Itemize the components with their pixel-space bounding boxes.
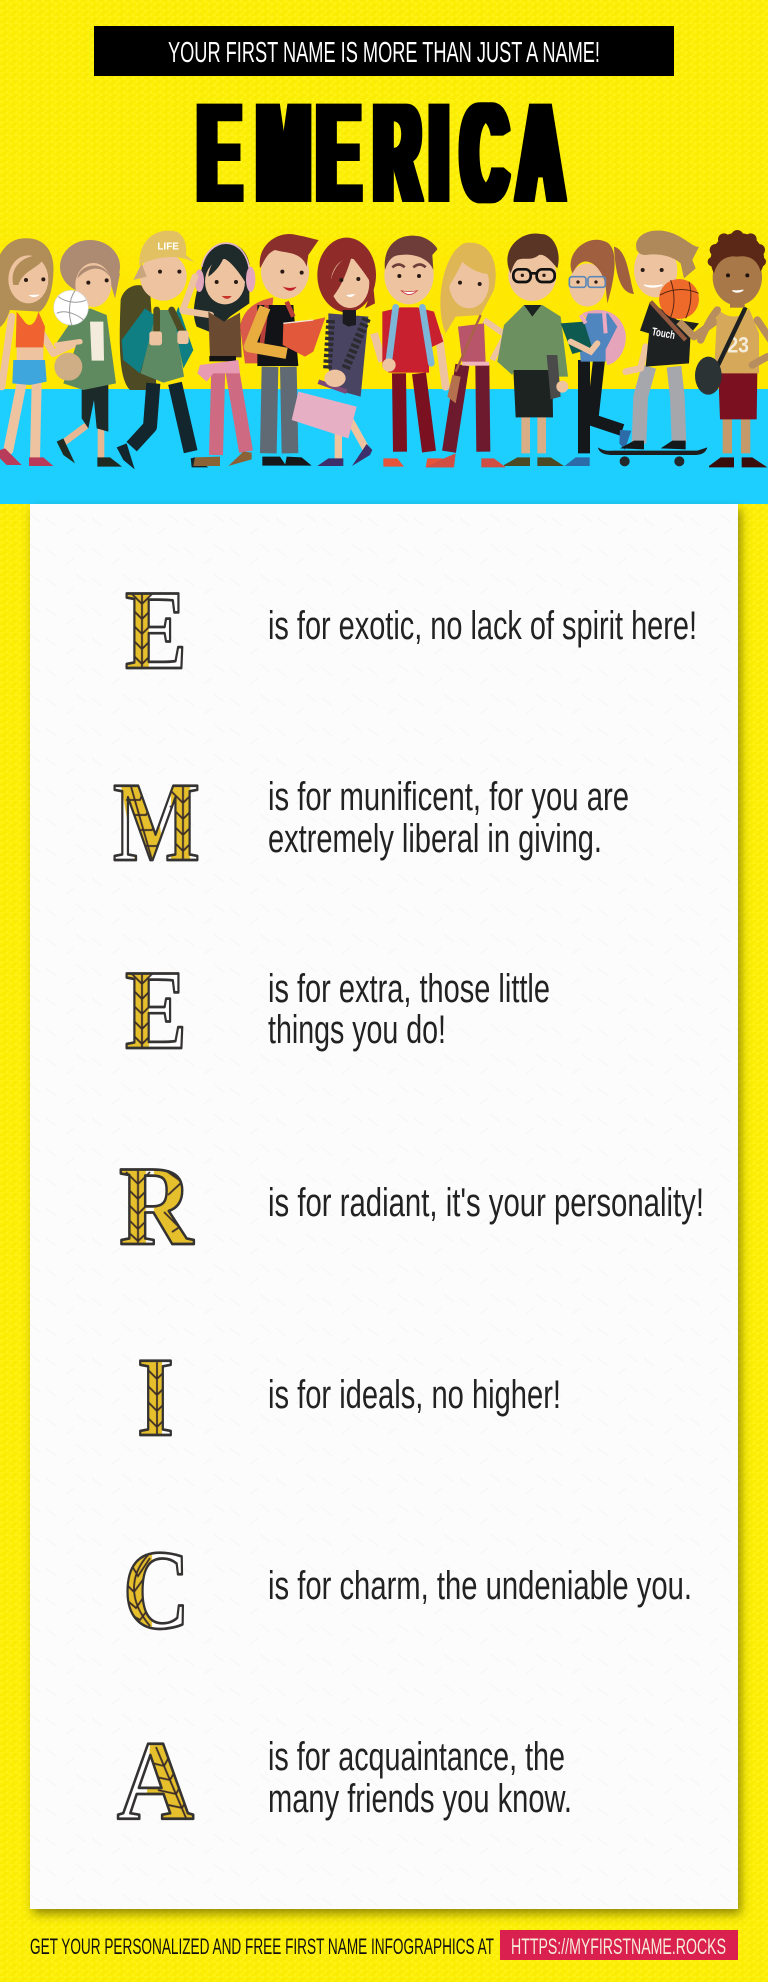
white panel	[30, 504, 738, 1909]
text: E lines	[268, 967, 550, 1052]
person: boy with cap and backpack	[117, 231, 208, 469]
letter C: C	[123, 1528, 190, 1653]
text: M lines	[268, 775, 629, 861]
person: skater boy with basketball: Touch	[651, 326, 676, 342]
blue ground band	[0, 389, 768, 504]
text: E lines: things you do!	[268, 1008, 446, 1052]
person: girl in orange top	[0, 238, 78, 466]
person: skater boy with basketball	[598, 230, 717, 466]
person: boy with tank top and shoulder bag: 23	[727, 333, 749, 358]
letter E: E	[125, 568, 187, 693]
illustration: group of people, right half	[374, 230, 768, 467]
person: boy with tank top and shoulder bag	[695, 230, 768, 467]
illustration: group of people, left half	[0, 231, 376, 469]
text: I line: is for ideals, no higher!	[268, 1373, 561, 1417]
letter I: I	[137, 1335, 174, 1460]
person: boy with cap and backpack: LIFE	[157, 241, 179, 252]
footer text: GET YOUR PERSONALIZED AND FREE FIRST NAME INFOGRAPHICS AT	[30, 1934, 494, 1959]
person: boy with book	[240, 234, 325, 466]
person: girl with volleyball	[54, 240, 122, 467]
letter M: M	[113, 760, 200, 885]
title: EMERICA	[198, 74, 563, 231]
letter E: E	[125, 948, 187, 1073]
person: boy in red shirt	[374, 236, 453, 467]
text: A lines: is for acquaintance, the	[268, 1735, 565, 1779]
text: M lines: extremely liberal in giving.	[268, 817, 602, 861]
top banner	[94, 26, 674, 76]
text: A lines	[268, 1735, 572, 1821]
person: girl with headphones	[183, 243, 255, 466]
person: girl with tablet	[561, 240, 634, 466]
text: M lines: is for munificent, for you are	[268, 775, 629, 819]
text: A lines: many friends you know.	[268, 1777, 572, 1821]
person: boy with glasses	[497, 233, 568, 466]
text: E lines: is for extra, those little	[268, 967, 550, 1011]
letter A: A	[117, 1719, 194, 1844]
person: girl with pink bag	[292, 238, 376, 466]
letter R: R	[119, 1144, 194, 1269]
person: blond girl	[426, 243, 506, 467]
